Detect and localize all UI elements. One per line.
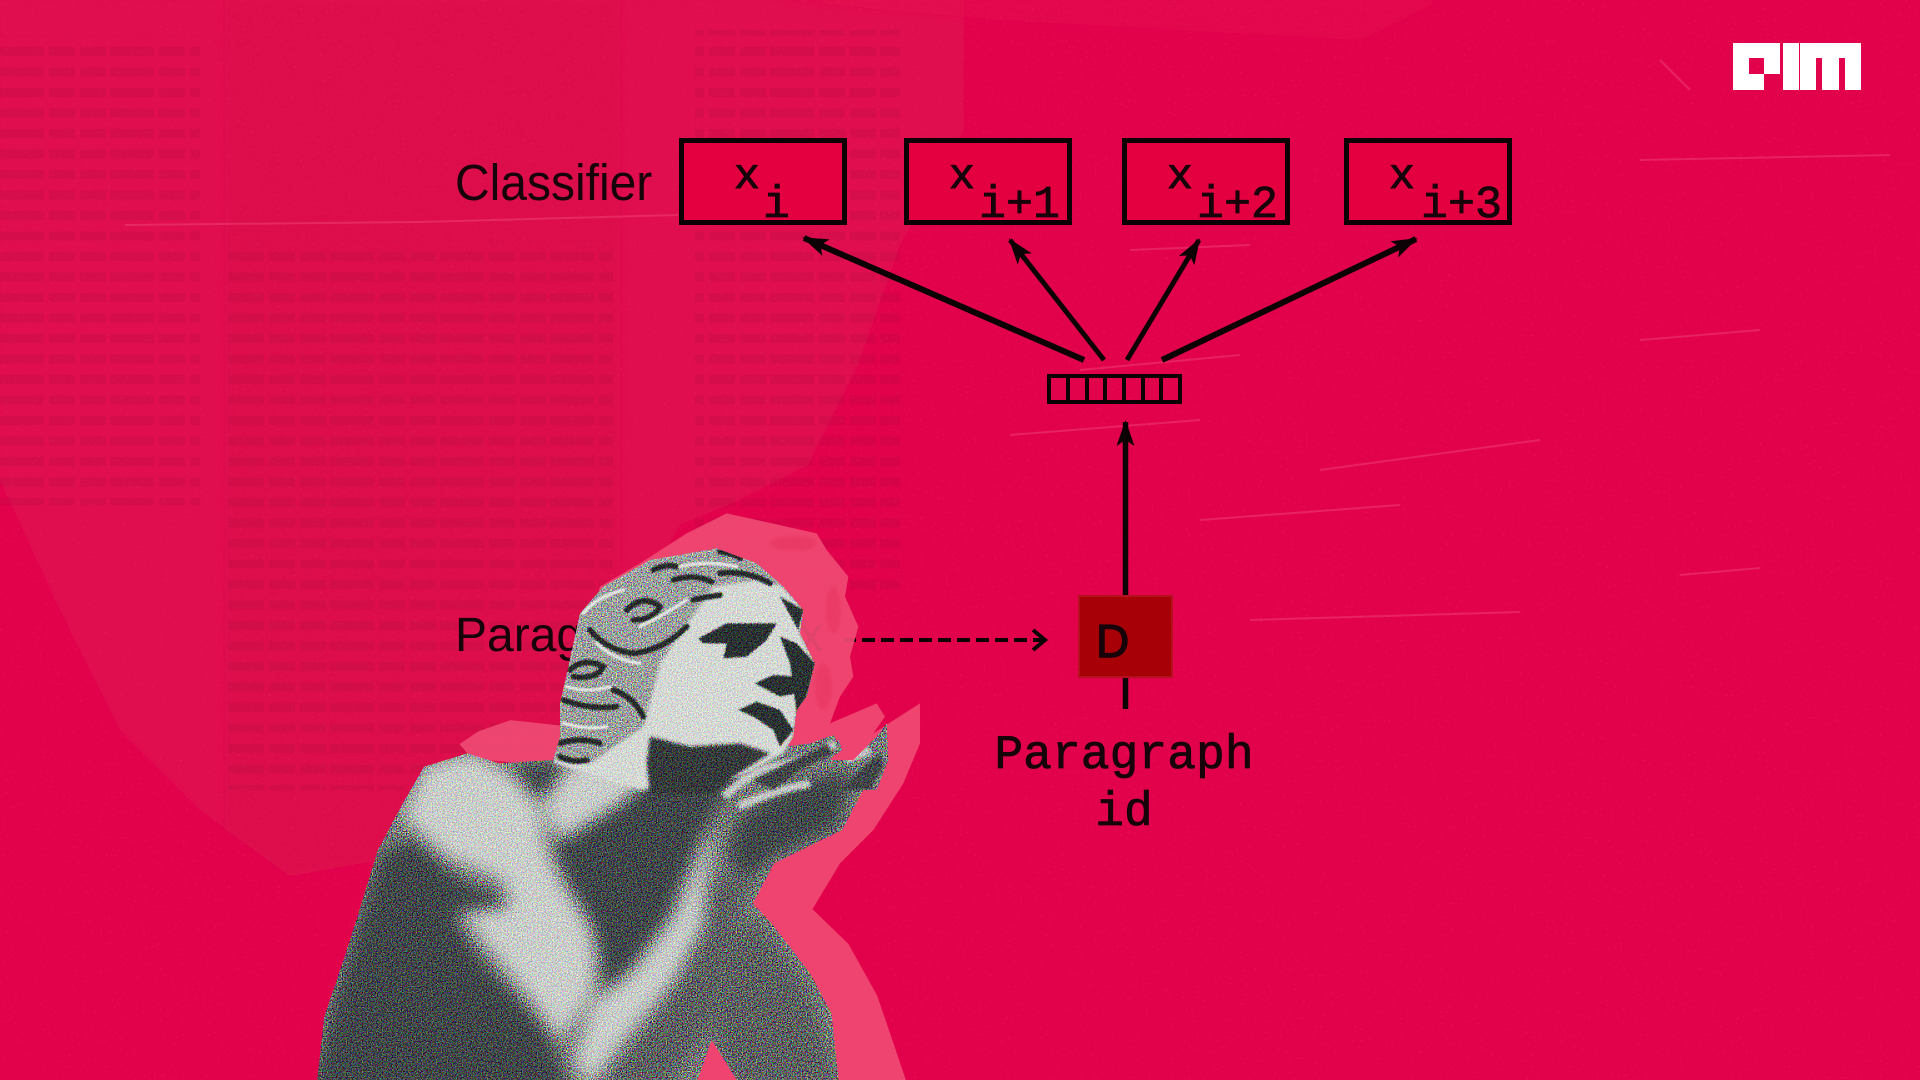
box text x: x [1389,152,1415,201]
statue noise [317,548,888,1080]
box x_i [682,140,844,231]
letter D: D [1096,615,1129,667]
statue head shading [553,548,883,793]
neck shadow [647,737,770,793]
box text i: i [763,180,790,231]
hair base [553,548,783,763]
statue body shading [310,743,870,1080]
hand shading [753,743,883,790]
box D [1079,596,1172,677]
box x_i+2 [1124,140,1288,231]
dashed arrow from matrix to D [843,630,1045,650]
label: Paragraph id [994,729,1254,840]
arrows from vector to classifier boxes [804,238,1416,360]
box text x: x [949,152,975,201]
face features [698,597,815,747]
hair dark curls [560,552,770,761]
arrow from D to vector [1123,422,1128,596]
label: Paragraph id: id [1095,786,1153,840]
label: Paragraph Matrix: Paragraph Matrix [455,609,823,662]
paragraph vector cells [1049,376,1180,402]
paper scratches [125,60,1890,620]
label: Classifier: Classifier [455,154,652,211]
box x_i+1 [906,140,1070,231]
box x_i+3 [1346,140,1510,231]
box text x: x [734,152,760,201]
box text i+2: i+2 [1197,180,1278,231]
shadow mottling [770,536,841,710]
pink statue shadow [459,513,920,1080]
stem below D [1123,676,1128,709]
hair light curls [563,563,737,728]
AIM logo [1733,43,1861,90]
box text i+3: i+3 [1421,180,1502,231]
box text i+1: i+1 [979,180,1060,231]
newspaper backdrop [0,0,1440,876]
box text x: x [1167,152,1193,201]
statue [317,548,888,1080]
label: Paragraph id: Paragraph [994,729,1254,783]
